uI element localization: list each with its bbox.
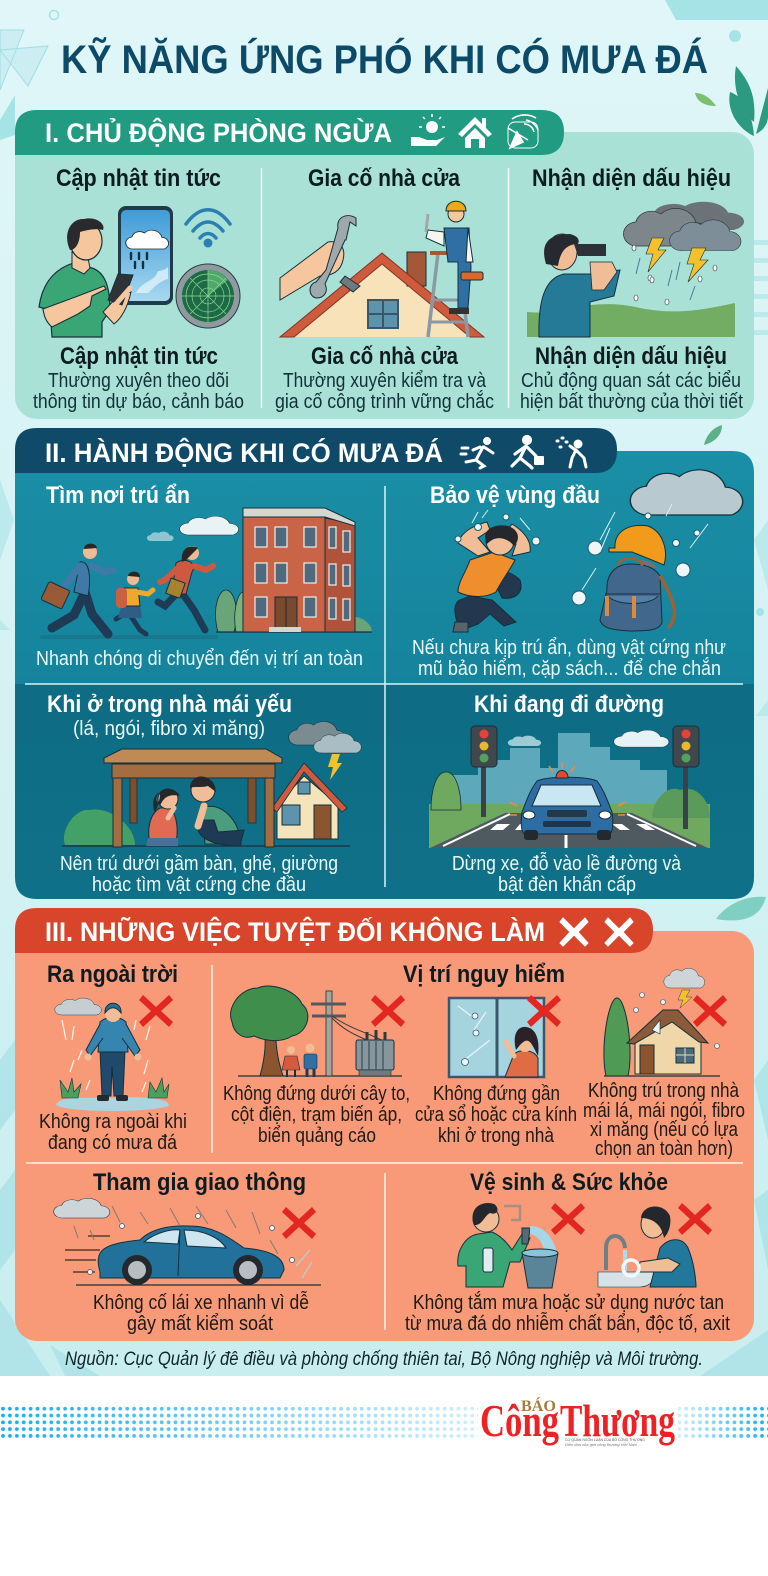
hail text: stop car: bật đèn khẩn cấp [498, 874, 636, 896]
text: do not stand under trees [223, 1083, 410, 1147]
icon: radar dish [508, 115, 538, 148]
icon: person shielding from hail [557, 438, 586, 467]
icon: running person [461, 438, 493, 468]
text: do not stand near windows: cửa sổ hoặc cửa kính [415, 1104, 577, 1126]
icon: red cross [693, 995, 727, 1027]
news subtitle and description: Cập nhật tin tức [60, 343, 218, 370]
heading: head protection: Bảo vệ vùng đầu [430, 482, 600, 509]
illustration: person outdoors in hail [55, 998, 169, 1111]
heading: reinforce: Gia cố nhà cửa [308, 165, 461, 192]
hail text: under table: hoặc tìm vật cứng che đầu [92, 874, 306, 896]
text: do not stand near windows: Không đứng gần [433, 1083, 560, 1105]
hail text: use hard objects: mũ bảo hiểm, cặp sách... để che chắn [418, 657, 721, 680]
signs subtitle and description: Nhận diện dấu hiệu [535, 343, 727, 370]
icon: white crosses [560, 918, 633, 946]
reinforce subtitle and description: gia cố công trình vững chắc [275, 390, 494, 413]
illustration: man washing hands [598, 1206, 696, 1287]
girl running [116, 572, 153, 634]
text: do not shelter under weak roofs [583, 1080, 745, 1160]
text: do not drive fast [93, 1291, 309, 1335]
illustration: tree, power pole and transformer [231, 986, 402, 1077]
news subtitle and description: thông tin dự báo, cảnh báo [33, 391, 244, 413]
icon: sun in hand [411, 114, 445, 146]
heading: news: Cập nhật tin tức [56, 165, 221, 192]
logo: Báo Công Thương: CƠ QUAN NGÔN LUẬN CỦA BỘ CÔNG THƯƠNG [565, 1437, 645, 1442]
news subtitle and description [33, 343, 244, 413]
text: do not use hail water [405, 1291, 730, 1335]
heading: section III: III. NHỮNG VIỆC TUYỆT ĐỐI KHÔNG LÀM [45, 915, 545, 947]
logo: Báo Công Thương: Công [480, 1395, 559, 1446]
woman running [158, 546, 213, 630]
note: roof types: (lá, ngói, fibro xi măng) [73, 718, 265, 740]
illustration: damaged house in hail [604, 968, 720, 1076]
reinforce subtitle and description: Gia cố nhà cửa [311, 343, 459, 370]
icon: person with bag [512, 436, 544, 468]
illustration: person at cracked window [449, 998, 544, 1077]
hail text: under table [60, 853, 338, 896]
text: do not go outside [39, 1111, 187, 1154]
text: do not shelter under weak roofs: xi măng (nếu có lựa [590, 1119, 739, 1141]
heading: section II: II. HÀNH ĐỘNG KHI CÓ MƯA ĐÁ [45, 437, 443, 468]
text: do not shelter under weak roofs: Không trú trong nhà [588, 1080, 740, 1102]
title: KỸ NĂNG ỨNG PHÓ KHI CÓ MƯA ĐÁ [61, 36, 708, 82]
icon: red cross [282, 1207, 316, 1239]
text: do not stand under trees: cột điện, trạm biến áp, [231, 1104, 402, 1126]
logo: Báo Công Thương: Diễn đàn của giới công thương Việt Nam [565, 1442, 637, 1447]
signs subtitle and description: Chủ động quan sát các biểu [521, 370, 741, 392]
divider lines [26, 965, 743, 1330]
footer dot bands [0, 1405, 768, 1439]
heading: hygiene: Vệ sinh & Sức khỏe [470, 1169, 668, 1196]
illustration: man with phone, wifi and radar [39, 206, 240, 337]
heading: weak roof: Khi ở trong nhà mái yếu [47, 691, 292, 718]
panel: I. prevention [15, 110, 754, 419]
illustration: wrench, house and worker on ladder [280, 201, 485, 337]
panel: II. during hail [15, 428, 754, 899]
hail text: stop car: Dừng xe, đỗ vào lề đường và [452, 852, 682, 875]
logo: Báo Công Thương: BÁO [521, 1396, 556, 1415]
illustration: man collecting melted water [458, 1203, 558, 1288]
icon: red cross [371, 995, 405, 1027]
text: do not stand near windows: khi ở trong nhà [438, 1125, 555, 1147]
heading: signs: Nhận diện dấu hiệu [532, 165, 731, 192]
hail text: stop car [452, 852, 682, 896]
heading: traffic: Tham gia giao thông [93, 1169, 306, 1196]
hail text: under table: Nên trú dưới gầm bàn, ghế, giường [60, 853, 338, 875]
hail text: use hard objects [412, 637, 726, 680]
logo: Báo Công Thương: Thương [560, 1395, 675, 1446]
hail text: move to safety: Nhanh chóng di chuyển đến vị trí an toàn [36, 648, 363, 670]
illustration: car stopped with hazard lights [429, 726, 710, 848]
text: do not stand near windows [415, 1083, 577, 1147]
heading: dangerous spots: Vị trí nguy hiểm [403, 961, 565, 988]
text: do not go outside: đang có mưa đá [48, 1132, 178, 1154]
text: do not drive fast: gây mất kiểm soát [127, 1313, 273, 1335]
text: do not go outside: Không ra ngoài khi [39, 1111, 187, 1133]
text: do not drive fast: Không cố lái xe nhanh vì dễ [93, 1291, 309, 1314]
text: do not stand under trees: Không đứng dưới cây to, [223, 1083, 410, 1105]
heading: section I: I. CHỦ ĐỘNG PHÒNG NGỪA [45, 116, 392, 148]
illustration: person covering head, helmet and backpack [453, 470, 743, 632]
text: do not shelter under weak roofs: mái lá, mái ngói, fibro [583, 1100, 745, 1122]
icon: red cross [527, 995, 561, 1027]
heading: outdoors: Ra ngoài trời [47, 961, 178, 988]
divider lines [262, 168, 508, 408]
text: do not use hail water: Không tắm mưa hoặc sử dụng nước tan [413, 1291, 724, 1314]
reinforce subtitle and description [275, 343, 494, 413]
reinforce subtitle and description: Thường xuyên kiểm tra và [283, 370, 487, 392]
text: do not shelter under weak roofs: chọn an toàn hơn) [595, 1138, 733, 1160]
heading: on the road: Khi đang đi đường [474, 691, 664, 718]
signs subtitle and description: hiện bất thường của thời tiết [520, 391, 743, 413]
man's briefcase [41, 581, 70, 609]
heading: shelter: Tìm nơi trú ẩn [46, 482, 190, 509]
illustration: speeding car in rain [54, 1198, 321, 1285]
divider lines [384, 486, 386, 887]
man running [52, 544, 113, 634]
icon: red cross [551, 1203, 585, 1235]
icon: house [458, 117, 492, 148]
news subtitle and description: Thường xuyên theo dõi [48, 370, 229, 392]
illustration: person watching storm with binoculars [527, 202, 744, 337]
panel: III. never do [15, 908, 754, 1341]
illustration: family running to building [41, 508, 372, 637]
illustration: family under table [62, 721, 361, 847]
text: do not stand under trees: biển quảng cáo [258, 1125, 376, 1147]
icon: red cross [678, 1203, 712, 1235]
logo: Báo Công Thương [480, 1395, 675, 1447]
icon: red cross [139, 995, 173, 1027]
text: do not use hail water: từ mưa đá do nhiễm chất bẩn, độc tố, axit [405, 1312, 730, 1335]
signs subtitle and description [520, 343, 743, 413]
hail text: use hard objects: Nếu chưa kịp trú ẩn, dùng vật cứng như [412, 637, 726, 659]
